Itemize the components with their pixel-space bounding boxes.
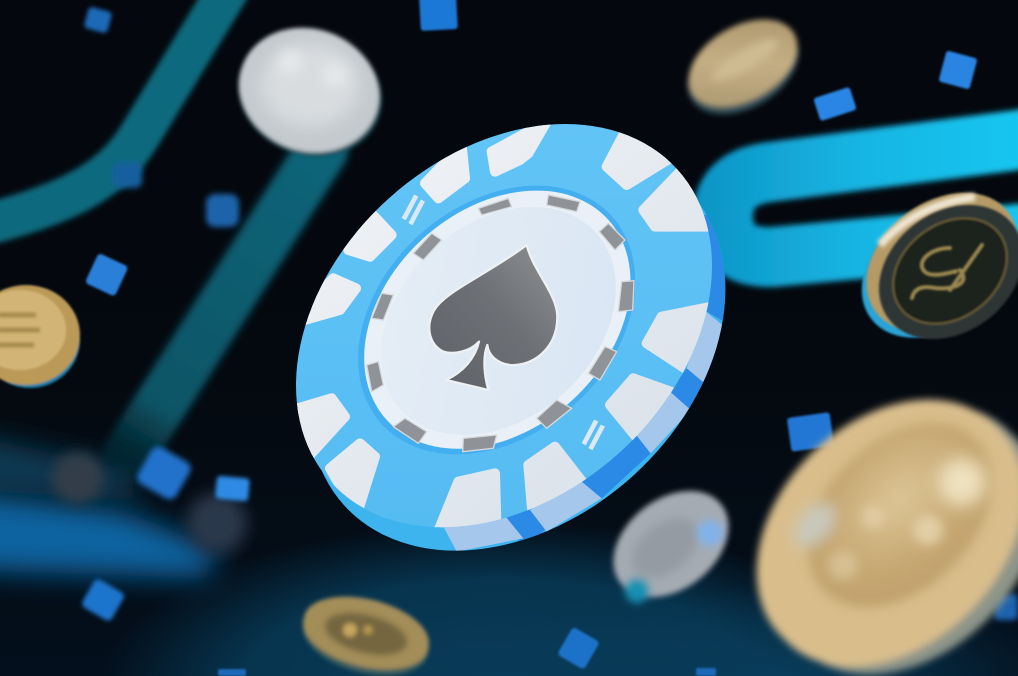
chip silver ring segments	[367, 195, 634, 452]
coin: blurred silver lower	[593, 469, 749, 619]
coin: gold bottom	[303, 597, 429, 675]
coin: large blurred gold lower right	[757, 386, 1018, 674]
chip edge thickness	[321, 204, 726, 551]
coin: blurred silver top	[220, 8, 400, 176]
coin: gold left	[0, 285, 80, 388]
background: glowing teal tubes upper left	[0, 0, 322, 456]
icon: spade	[429, 245, 557, 390]
chip inner white ring	[313, 138, 682, 501]
coin: gold top right	[672, 1, 814, 133]
chip inner blue channel	[305, 131, 689, 509]
poker chip	[296, 124, 726, 551]
chip inner disc	[335, 161, 661, 481]
coin: dark dollar coin right	[835, 164, 1018, 367]
chip face with white edge inserts	[296, 124, 712, 528]
background: bright blue tube right	[723, 137, 1018, 257]
chip lettering marks	[402, 194, 605, 450]
background: lower blue glow	[0, 435, 1018, 676]
